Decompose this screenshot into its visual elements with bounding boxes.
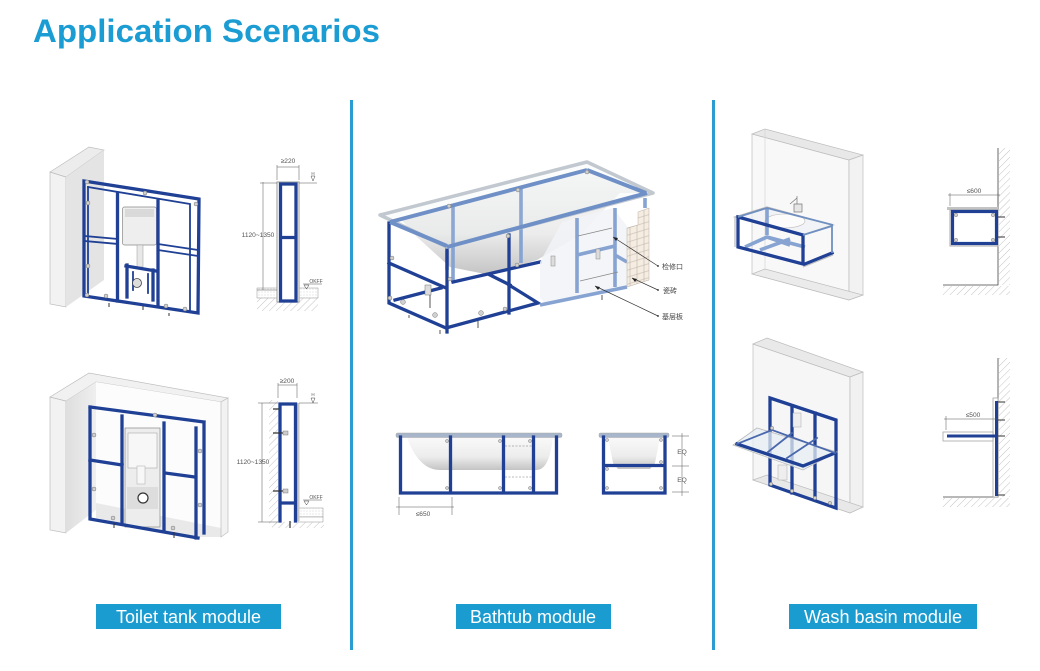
callout: base board xyxy=(595,286,683,321)
elevation: bathtub side view: EQ xyxy=(677,449,687,456)
section: toilet frame in wall, 1120–1350 xyxy=(237,378,324,528)
section: basin cabinet, ≤600 xyxy=(943,148,1010,295)
label: toilet tank module: Toilet tank module xyxy=(116,607,261,627)
illustration: bathtub frame with cutaway xyxy=(380,162,653,334)
section: toilet frame in wall, 1120–1350: 1120~1350 xyxy=(237,459,270,466)
illustration: toilet frame in wall corner xyxy=(50,373,228,538)
section: toilet frame, 1120–1350 xyxy=(242,158,323,311)
panel: toilet tank module xyxy=(50,147,324,629)
section: toilet frame, 1120–1350: 1120~1350 xyxy=(242,232,275,239)
callout: inspection opening: 检修口 xyxy=(662,262,683,271)
section: toilet frame in wall, 1120–1350: OKFF xyxy=(309,495,323,501)
label: bathtub module xyxy=(456,604,611,629)
illustration: wall-mounted basin shelf frame xyxy=(733,338,863,513)
label: wash basin module: Wash basin module xyxy=(804,607,962,627)
section: toilet frame in wall, 1120–1350: H xyxy=(311,392,315,397)
section: basin shelf, ≤500 xyxy=(943,358,1010,507)
label: toilet tank module xyxy=(96,604,281,629)
section: toilet frame in wall, 1120–1350: ≥200 xyxy=(280,378,295,385)
panel: wash basin module xyxy=(733,129,1010,629)
callout: tile xyxy=(632,278,677,295)
section: basin shelf, ≤500: ≤500 xyxy=(966,412,981,419)
callout: inspection opening xyxy=(613,237,683,271)
section: basin cabinet, ≤600: ≤600 xyxy=(967,188,982,195)
label: wash basin module xyxy=(789,604,977,629)
panel: bathtub module xyxy=(380,162,689,629)
section: toilet frame, 1120–1350: H xyxy=(311,171,315,176)
title: Application Scenarios xyxy=(33,13,380,49)
section: toilet frame, 1120–1350: ≥220 xyxy=(281,158,296,165)
elevation: bathtub side view xyxy=(599,433,689,496)
illustration: toilet frame beside wall pillar xyxy=(50,147,199,316)
elevation: bathtub side view: EQ xyxy=(677,477,687,484)
elevation: bathtub front view xyxy=(396,433,562,518)
divider: right xyxy=(712,100,715,650)
elevation: bathtub front view: ≤650 xyxy=(416,511,431,518)
label: bathtub module: Bathtub module xyxy=(470,607,596,627)
illustration: wall-hung basin cabinet frame xyxy=(735,129,863,300)
callout: base board: 基层板 xyxy=(662,312,683,321)
divider: left xyxy=(350,100,353,650)
callout: tile: 瓷砖 xyxy=(663,286,677,295)
section: toilet frame, 1120–1350: OKFF xyxy=(309,279,323,285)
